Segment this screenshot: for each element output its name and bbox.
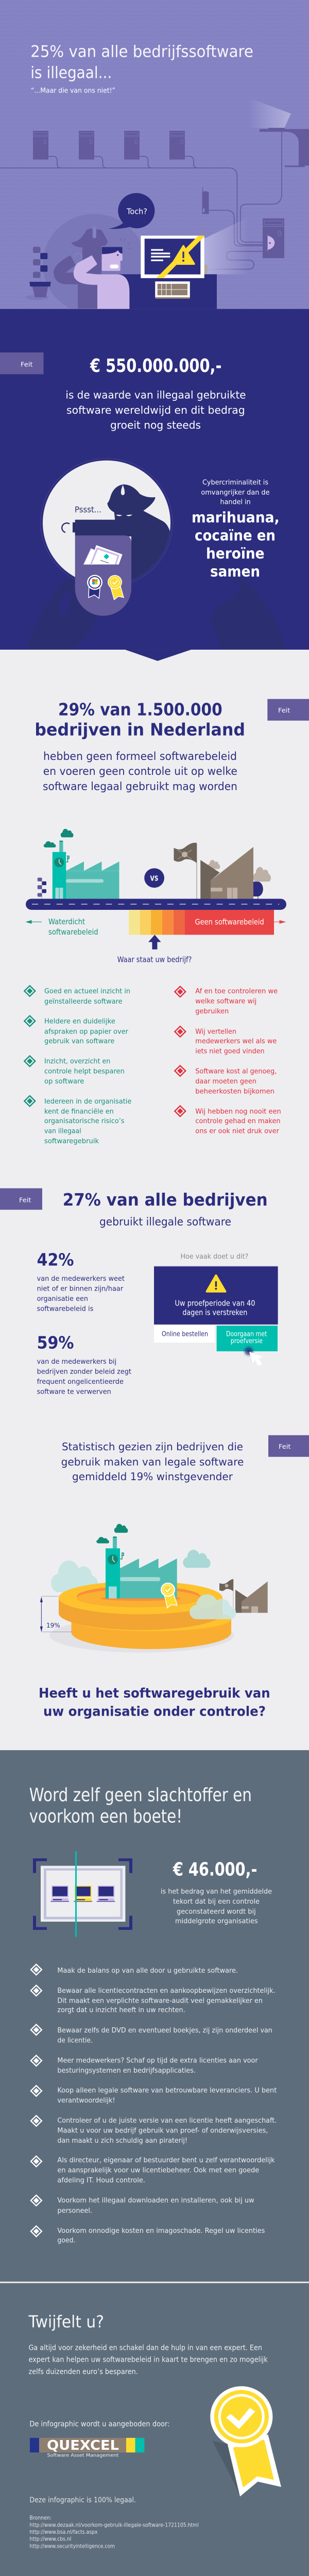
stat: 42%: softwarebeleid is [37, 1305, 93, 1313]
panel: light section [0, 650, 309, 1750]
illustration: globe continents [27, 558, 285, 650]
logo: quexcel [30, 2438, 144, 2458]
tab: feit [0, 352, 44, 374]
button: doorgaan [217, 1326, 278, 1351]
list: tips: Voorkom onnodige kosten en imagoschade. Regel uw licenties [57, 2227, 265, 2235]
text: sources: http://www.dezaak.nl/voorkom-gebruik-illegale-software-1721105.html [29, 2522, 199, 2528]
text block: expert: Ga altijd voor zekerheid en schakel dan de hulp in van een expert. Een [29, 2344, 262, 2352]
stat: 42%: van de medewerkers weet [37, 1275, 125, 1283]
list: good: van illegaal [44, 1127, 81, 1136]
panel: 550 miljoen [0, 309, 309, 650]
text block: geconstateerd wordt bij [177, 1908, 256, 1916]
list: good: Heldere en duidelijke [44, 1018, 115, 1026]
text block: cybercriminaliteit: heroïne [206, 545, 265, 562]
icon: medal [210, 2386, 281, 2497]
logo: quexcel: Software Asset Management [47, 2453, 119, 2458]
illustration: desk [97, 274, 217, 309]
title: is illegaal... [30, 64, 112, 82]
list: tips: goed. [57, 2236, 76, 2244]
icon: beige connector [204, 265, 208, 274]
big number: € 550.000.000,- [90, 355, 222, 377]
illustration: background circle [43, 214, 141, 308]
text block: expert: zelfs duizenden euro’s besparen. [29, 2368, 138, 2376]
list: good: Goed en actueel inzicht in [44, 987, 130, 995]
dialog: trial expired [154, 1266, 278, 1325]
factory [96, 1524, 177, 1598]
list: tips: Bewaar zelfs de DVD en eventueel boekjes, zij zijn onderdeel van [57, 2026, 272, 2035]
button: online bestellen: Online bestellen [162, 1330, 208, 1338]
heading: 27%: 27% van alle bedrijven [63, 1190, 268, 1210]
text block: cybercriminaliteit: omvangrijker dan de [201, 488, 270, 497]
list: good: afspraken op papier over [44, 1027, 128, 1036]
list: bad: iets niet goed vinden [195, 1047, 265, 1055]
tab: feit: Feit [278, 707, 290, 715]
tab: feit: Feit [279, 1443, 290, 1451]
list: good: organisatorische risico’s [44, 1117, 125, 1125]
text block: software legaal gebruikt mag worden [43, 781, 237, 793]
heading: twijfelt: Twijfelt u? [28, 2312, 104, 2331]
tab: feit: Feit [19, 1197, 31, 1204]
arrow: red [274, 920, 285, 923]
text block: tekort dat bij een controle [173, 1897, 260, 1906]
stat: 42%: 42% [37, 1250, 74, 1269]
dimension: 19%: 19% [46, 1622, 60, 1630]
stat: 42%: niet of er binnen zijn/haar [37, 1285, 123, 1293]
scale bar [129, 910, 274, 935]
illustration: coat pocket with certificates [75, 535, 131, 616]
text block: software wereldwijd en dit bedrag [66, 404, 245, 416]
list: good: Iedereen in de organisatie [44, 1097, 131, 1106]
illustration: glow from monitor [204, 217, 248, 274]
list: tips: Maakt u voor uw bedrijf gebruik van proef- of onderwijsversies, [57, 2127, 268, 2134]
list: tips: zorgt dat u inzicht heeft in uw rechten. [57, 2006, 185, 2014]
list: tips [31, 1964, 277, 2244]
heading: question: Heeft u het softwaregebruik van [39, 1686, 270, 1701]
scale bar: Geen softwarebeleid [195, 918, 264, 926]
list: bad [175, 987, 281, 1136]
list: tips: Maak de balans op van alle door u gebruikte software. [57, 1967, 238, 1975]
laptop 3 [97, 1886, 115, 1902]
list: good: geïnstalleerde software [44, 997, 123, 1006]
list: tips: en aansprakelijk voor uw licentiebeheer. Ook met een goede [57, 2166, 259, 2175]
icon: cursor [243, 1346, 263, 1366]
list: bad: welke software wij [195, 997, 256, 1006]
illustration: person [74, 238, 131, 309]
text block [43, 750, 237, 793]
big number: € 46.000,- [173, 1859, 257, 1880]
illustration: pirate behind person [54, 228, 108, 309]
illustration: factory on coin [40, 1524, 268, 1653]
icon: keyboard [155, 281, 190, 299]
tab: feit: Feit [21, 361, 33, 369]
panel: prevention [0, 1750, 309, 2576]
heading: 29% [35, 700, 245, 739]
text: aangeboden: De infographic wordt u aangeboden door: [29, 2420, 170, 2429]
text block: groeit nog steeds [110, 419, 201, 431]
stat: 59%: 59% [37, 1333, 74, 1353]
list: bad: daar moeten geen [195, 1077, 256, 1086]
heading: question [39, 1686, 270, 1720]
pirate company small [219, 1579, 268, 1613]
list: tips: besturingsystemen en bedrijfsapplicaties. [57, 2066, 196, 2075]
stat: 59%: van de medewerkers bij [37, 1358, 116, 1366]
tab: feit [267, 699, 309, 721]
stat: 59%: frequent ongelicentieerde [37, 1378, 124, 1386]
icon: vs badge: VS [150, 874, 159, 883]
heading: 29%: bedrijven in Nederland [35, 720, 245, 739]
title [30, 43, 253, 82]
text block [161, 1888, 272, 1925]
text block: statistiek: gebruik maken van legale software [61, 1456, 244, 1468]
text block: cybercriminaliteit [192, 479, 280, 580]
heading: 27%: gebruikt illegale software [99, 1216, 231, 1228]
text block: middelgrote organisaties [175, 1917, 258, 1925]
text block: expert [29, 2344, 268, 2376]
list: tips: personeel. [57, 2207, 92, 2215]
list: tips: Voorkom het illegaal downloaden en installeren, ook bij uw [57, 2196, 254, 2205]
list: good: softwaregebruik [44, 1137, 99, 1145]
text block: cybercriminaliteit: Cybercriminaliteit is [202, 479, 268, 487]
heading [29, 1785, 252, 1827]
text block: cybercriminaliteit: marihuana, [192, 509, 280, 526]
illustration: cables [0, 132, 282, 269]
stat: 59% [37, 1333, 131, 1396]
list: bad: Wij vertellen [195, 1027, 236, 1036]
text block: cybercriminaliteit: handel in [220, 498, 251, 506]
logo: quexcel: QUEXCEL [47, 2438, 119, 2453]
list: good [24, 986, 131, 1145]
text block: cybercriminaliteit: samen [210, 563, 260, 580]
text block: is het bedrag van het gemiddelde [161, 1888, 272, 1895]
heading: question: uw organisatie onder controle? [43, 1704, 266, 1720]
icon: plant [38, 877, 46, 899]
stat: 42% [37, 1250, 125, 1313]
arrow: section chevron [125, 650, 191, 661]
icon: badge microsoft [87, 575, 102, 598]
list: tips: Koop alleen legale software van betrouwbare leveranciers. U bent [57, 2086, 277, 2094]
list: good: op software [44, 1077, 84, 1086]
text: sources: http://www.bsa.nl/facts.aspx [29, 2529, 97, 2535]
button: doorgaan: Doorgaan met [226, 1330, 267, 1338]
text block: cybercriminaliteit: cocaïne en [195, 527, 276, 544]
stat: 42%: organisatie een [37, 1295, 88, 1303]
stat: 59%: bedrijven zonder beleid zegt [37, 1368, 131, 1376]
dialog: trial expired: Uw proefperiode van 40 [175, 1299, 255, 1308]
subtitle: “...Maar die van ons niet!” [31, 87, 115, 95]
list: bad: Af en toe controleren we [195, 987, 278, 995]
list: tips: Bewaar alle licentiecontracten en aankoopbewijzen overzichtelijk. [57, 1987, 276, 1995]
heading: 27% [63, 1190, 268, 1228]
illustration: moon with pirate [41, 459, 175, 587]
button: doorgaan: proefversie [231, 1337, 263, 1345]
text: sources [29, 2515, 199, 2549]
tab: feit [0, 1188, 42, 1210]
stat: 59%: software te verwerven [37, 1388, 111, 1396]
text block: en voeren geen controle uit op welke [43, 765, 237, 778]
dialog: trial expired: dagen is verstreken [182, 1309, 247, 1317]
list: tips: afdeling IT. Houd controle. [57, 2176, 145, 2184]
laptop 2 [74, 1886, 92, 1902]
list: bad: Wij hebben nog nooit een [195, 1108, 281, 1116]
list: tips: de licentie. [57, 2037, 93, 2045]
text block: is de waarde van illegaal gebruikte [65, 389, 246, 401]
heading: 29%: 29% van 1.500.000 [58, 700, 222, 719]
panel: hero [0, 0, 309, 314]
illustration: road [26, 899, 286, 910]
text: legaal: Deze infographic is 100% legaal. [29, 2496, 136, 2504]
title: 25% van alle bedrijfssoftware [30, 43, 253, 61]
dimension: 19% [40, 1596, 72, 1632]
list: tips: Dit maakt een verplichte software-audit veel gemakkelijker en [57, 1997, 263, 2005]
coin [59, 1581, 231, 1649]
button: online bestellen [154, 1326, 215, 1343]
icon: router [202, 187, 209, 214]
label: waterdicht: softwarebeleid [48, 928, 98, 937]
icon: plant [26, 247, 51, 300]
icon: monitor with warning [141, 235, 204, 278]
icons: computer towers [33, 131, 185, 160]
list: good: kent de financiële en [44, 1108, 114, 1116]
arrow: green [26, 920, 42, 923]
callout: speech bubble: Toch? [126, 208, 147, 216]
icon: badge yellow [108, 575, 124, 600]
illustration: audit scan [33, 1851, 132, 1937]
heading: Word zelf geen slachtoffer en [29, 1785, 252, 1806]
illustration: pirate company [174, 843, 271, 899]
list: bad: Software kost al genoeg, [195, 1067, 277, 1075]
question: Waar staat uw bedrijf? [117, 955, 192, 964]
text: sources: http://www.cbs.nl [29, 2536, 72, 2543]
callout: speech bubble [108, 193, 154, 229]
text block: statistiek [61, 1440, 244, 1483]
list: tips: Controleer of u de juiste versie van een licentie heeft aangeschaft. [57, 2116, 277, 2125]
icon: server with disc [263, 218, 284, 258]
icon: vs badge [144, 868, 164, 888]
tab: feit [268, 1435, 309, 1457]
speech text: Pssst... [75, 505, 101, 514]
text: sources: http://www.securityintelligence.com [29, 2543, 115, 2549]
list: bad: gebruiken [195, 1007, 229, 1015]
heading: voorkom een boete! [29, 1806, 182, 1827]
illustration: laptop on desk [249, 98, 309, 167]
text block: statistiek: Statistisch gezien zijn bedrijven die [62, 1440, 243, 1453]
text: sources: Bronnen: [29, 2515, 52, 2521]
list: good: gebruik van software [44, 1037, 114, 1045]
list: good: Inzicht, overzicht en [44, 1057, 110, 1065]
icon: badge [161, 1583, 177, 1608]
label: waterdicht [48, 918, 98, 937]
list: tips: dan maakt u zich schuldig aan piraterij! [57, 2137, 187, 2145]
text block: hebben geen formeel softwarebeleid [43, 750, 237, 763]
list: tips: Meer medewerkers? Schaf op tijd de extra licenties aan voor [57, 2057, 258, 2065]
list: good: controle helpt besparen [44, 1067, 125, 1075]
label: waterdicht: Waterdicht [48, 918, 85, 926]
list: bad: controle gehad en maken [195, 1117, 281, 1125]
text block: expert: expert kan helpen uw softwarebeleid in kaart te brengen en zo mogelijk [29, 2356, 268, 2364]
laptop 1 [50, 1886, 69, 1902]
list: bad: beheerkosten bijkomen [195, 1088, 274, 1095]
list: tips: Als directeur, eigenaar of bestuurder bent u zelf verantwoordelijk [57, 2156, 275, 2164]
list: tips: verantwoordelijk! [57, 2096, 115, 2105]
list: bad: ons er ook niet druk over [195, 1127, 279, 1136]
label: question: Hoe vaak doet u dit? [181, 1252, 248, 1261]
list: bad: medewerkers wel als we [195, 1037, 277, 1045]
text block [65, 389, 246, 431]
arrow: up [148, 935, 161, 950]
illustration: legal factory [44, 829, 119, 899]
text block: statistiek: gemiddeld 19% winstgevender [72, 1470, 233, 1483]
